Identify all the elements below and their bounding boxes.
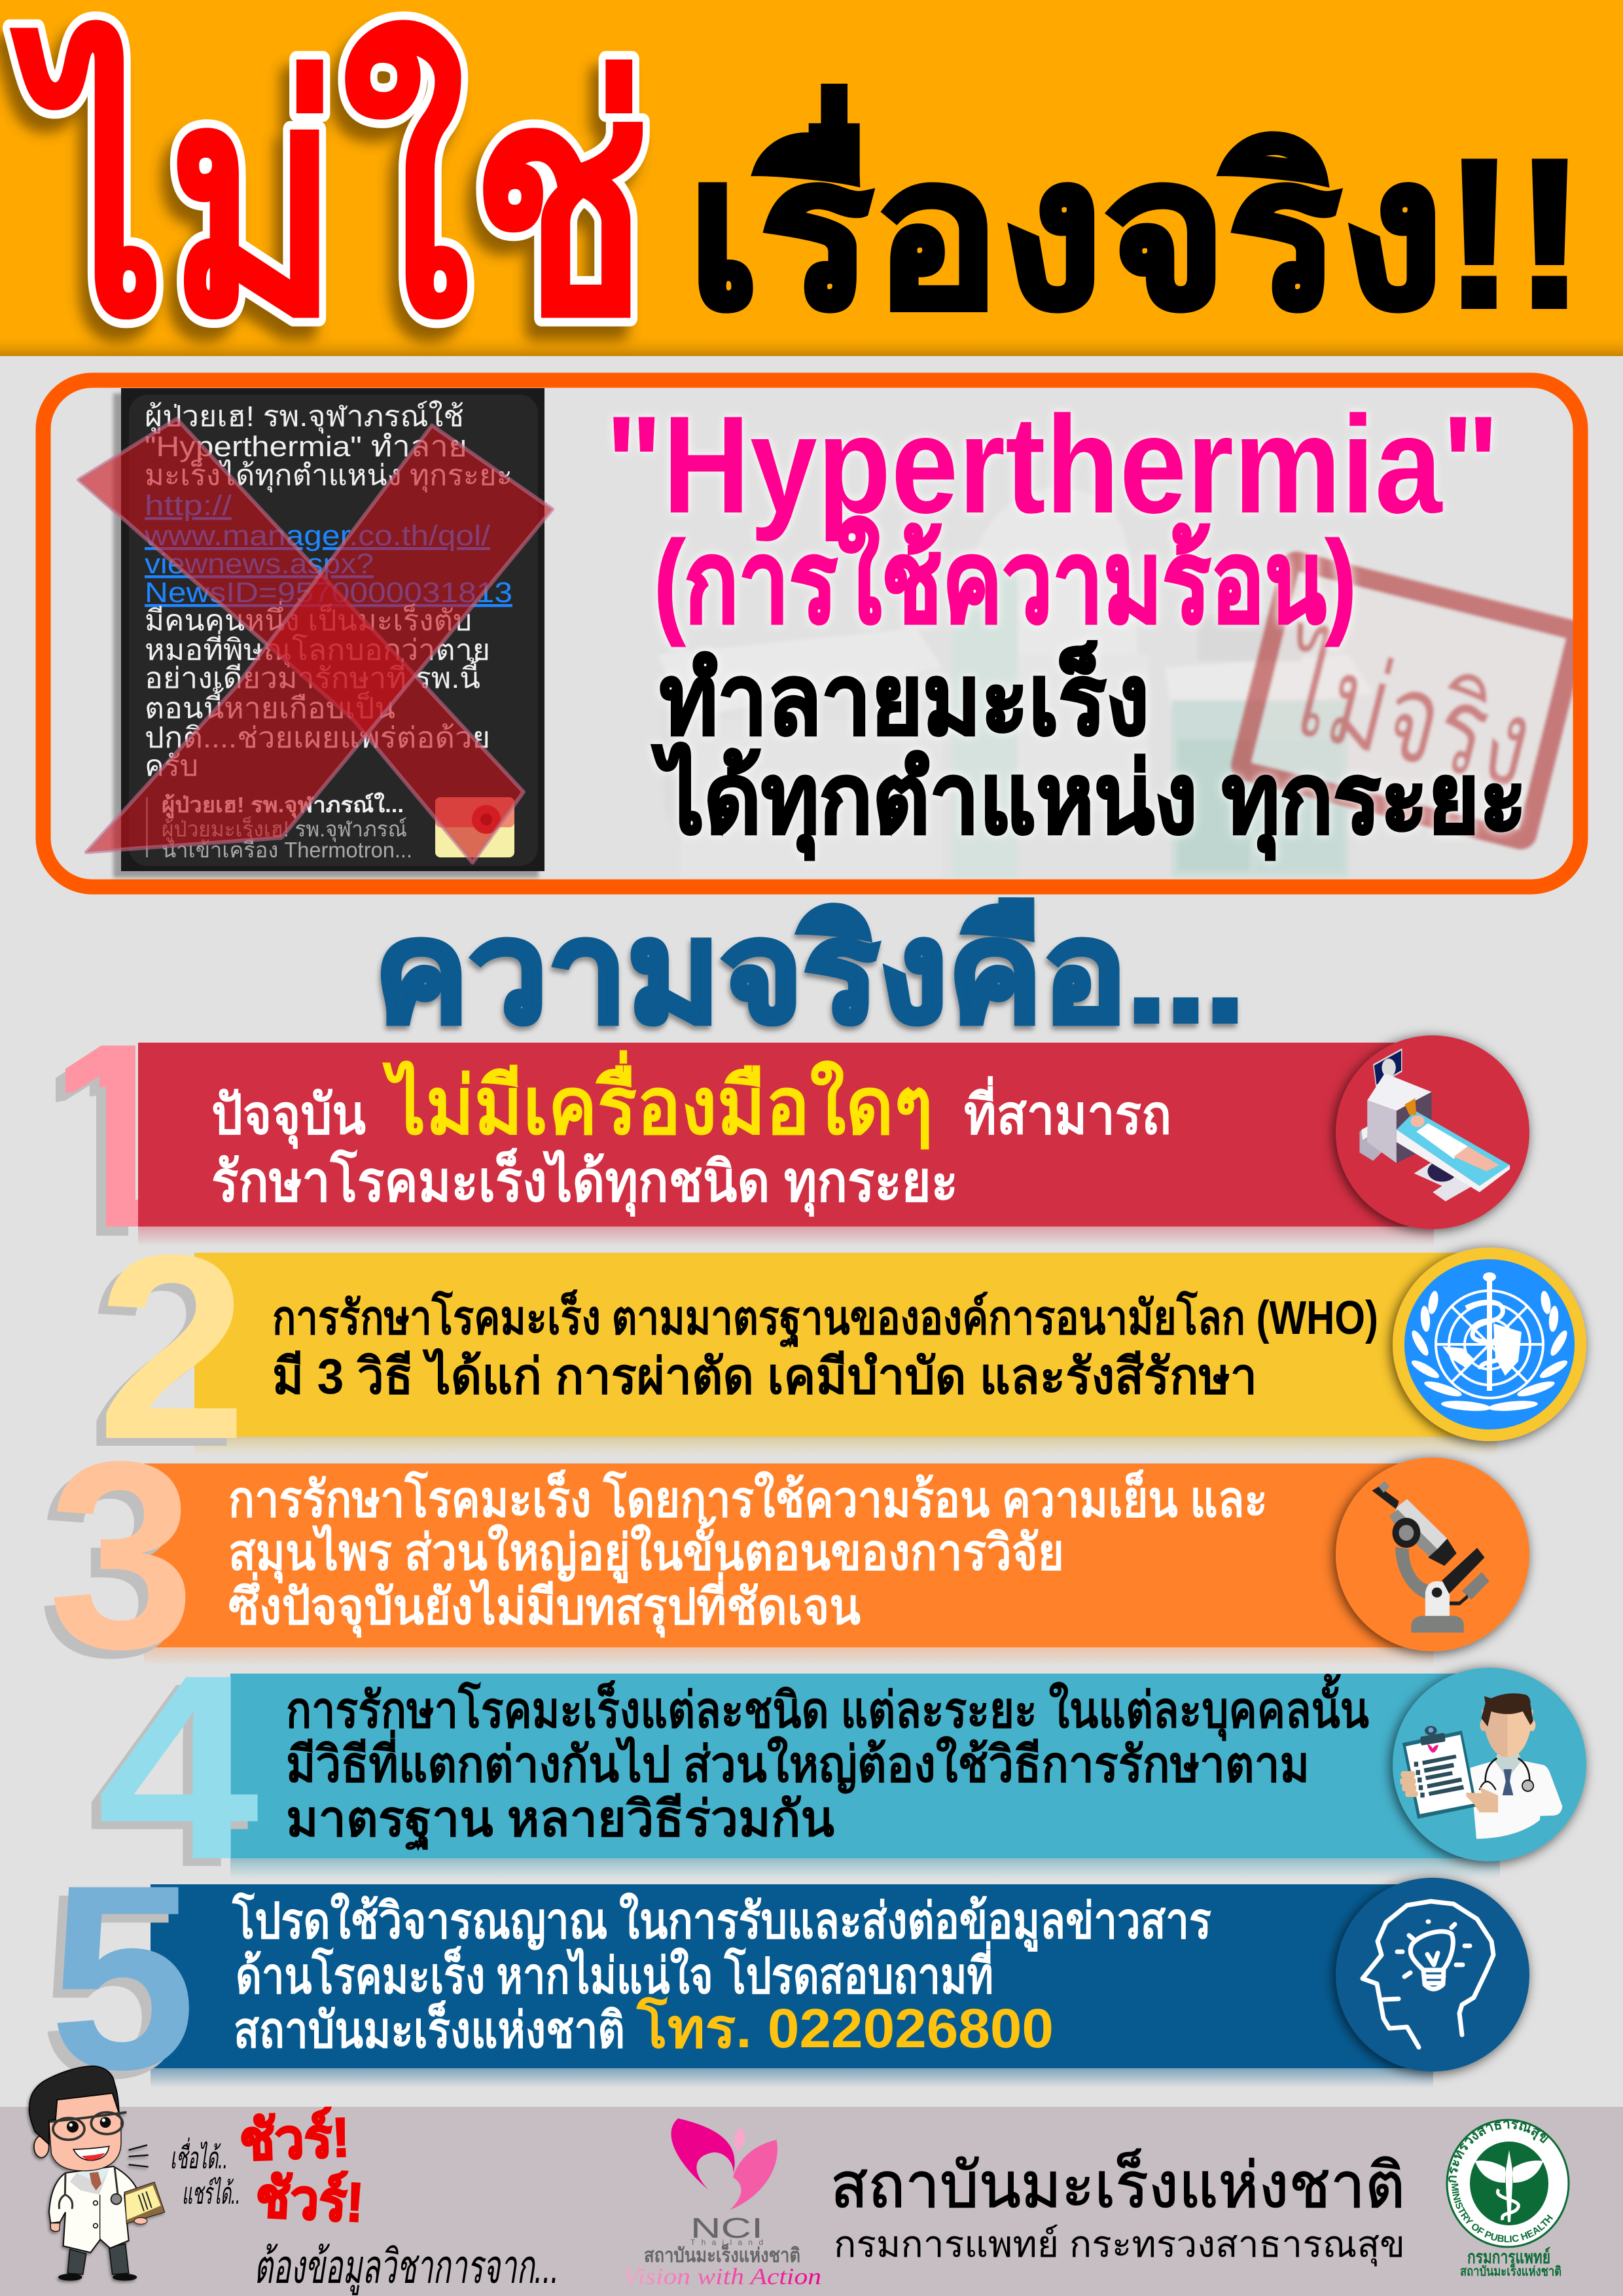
NCI logo: Vision with Action [623,2263,821,2289]
icon: MRI scanner [1336,1035,1529,1229]
message text: มีคนคนหนึ่ง เป็นมะเร็งตับ [145,600,472,637]
numeral 1 [56,1045,138,1236]
numeral 4: 4 [97,1621,261,1914]
numeral 4: 4 [87,1628,251,1922]
message text: www.manager.co.th/qol/ [144,520,491,552]
believe and share taglines: แชร์ได้.. [182,2176,240,2210]
message text: ตอนนี้หายเกือบเป็น [145,687,395,725]
numeral 1: 1 [28,998,175,1292]
message text: viewnews.aspx? [145,548,374,580]
fact 3 text: การรักษาโรคมะเร็ง โดยการใช้ความร้อน ความเย็น และ [228,1469,1268,1528]
fact 1 text [211,1050,1171,1217]
message text: ผู้ป่วยเฮ! รพ.จุฬาภรณ์ใช้ [145,400,464,434]
fact 3 text [228,1469,1268,1638]
Ministry of Public Health seal: กระทรวงสาธารณสุข [1448,2121,1548,2183]
seal caption: กรมการแพทย์ [1467,2247,1550,2267]
NCI logo: NCI [690,2212,763,2244]
subheading: use of heat: (การใช้ความร้อน) [654,516,1356,647]
header banner [0,0,1623,356]
message text: มะเร็งได้ทุกตำแหน่ง ทุกระยะ [145,458,512,493]
heading: the truth is: ความจริงคือ... [374,893,1245,1051]
organisation name: กรมการแพทย์ กระทรวงสาธารณสุข [834,2223,1405,2267]
fact 3 text: ซึ่งปัจจุบันยังไม่มีบทสรุปที่ชัดเจน [228,1571,861,1638]
believe and share taglines: เชื่อได้.. [170,2137,228,2175]
fact 1 text: ที่สามารถ [964,1076,1171,1145]
fact 2 text: มี 3 วิธี ได้แก่ การผ่าตัด เคมีบำบัด และรังสีรักษา [272,1348,1257,1405]
numeral 3: 3 [38,1415,185,1713]
fact 5 text: โทร. 022026800 [636,1997,1054,2059]
believe and share taglines: ต้องข้อมูลวิชาการจาก... [254,2241,559,2295]
fact 4 [87,1621,1586,1922]
footer band [0,2107,1623,2296]
fact 4 text: มีวิธีที่แตกต่างกันไป ส่วนใหญ่ต้องใช้วิธีการรักษาตาม [286,1729,1310,1794]
fact 1 text: รักษาโรคมะเร็งได้ทุกชนิด ทุกระยะ [211,1147,958,1217]
message text: NewsID=9570000031813 [145,577,512,609]
numeral 2: 2 [97,1200,247,1494]
fact 2 text [272,1289,1378,1405]
fact 5 text [232,1892,1211,2059]
numeral 5: 5 [49,1831,196,2125]
fact 5 [39,1831,1529,2133]
link preview [146,792,514,862]
fact 4 text: มาตรฐาน หลายวิธีร่วมกัน [286,1791,834,1851]
claim text [651,641,1527,860]
message text: ครับ [145,750,198,782]
icon: head with light bulb [1336,1878,1529,2072]
title: black word: เรื่องจริง!! [687,86,1585,351]
icon: microscope [1336,1458,1529,1651]
fact 4 text [286,1674,1369,1851]
message text [144,400,512,782]
message text: อย่างเดียวมารักษาที่ รพ.นี้ [145,657,480,694]
stamp: not true [1240,560,1578,841]
link preview: นำเข้าเครื่อง Thermotron... [162,835,412,862]
believe and share taglines: ชัวร์! [238,2106,351,2172]
fact 4 text: การรักษาโรคมะเร็งแต่ละชนิด แต่ละระยะ ในแต่ละบุคคลนั้น [286,1674,1369,1742]
cartoon doctor [29,2066,165,2281]
NCI logo [623,2119,821,2289]
message text: หมอที่พิษณุโลกบอกว่าตาย [145,630,490,668]
fact 2 text: การรักษาโรคมะเร็ง ตามมาตรฐานขององค์การอนามัยโลก (WHO) [272,1289,1378,1348]
organisation name: สถาบันมะเร็งแห่งชาติ [830,2148,1405,2221]
red X over screenshot [79,419,552,863]
faded medical equipment background [658,487,1374,877]
Ministry of Public Health seal: MINISTRY OF PUBLIC HEALTH [1452,2183,1553,2242]
seal caption [1460,2247,1561,2279]
heading: Hyperthermia: "Hyperthermia" [605,387,1499,542]
claim text: ทำลายมะเร็ง [660,641,1149,755]
fact 5 text: โปรดใช้วิจารณญาณ ในการรับและส่งต่อข้อมูลข่าวสาร [232,1892,1211,1952]
heading: Hyperthermia [605,387,1499,647]
claim text: ได้ทุกตำแหน่ง ทุกระยะ [651,743,1527,860]
numeral 5: 5 [39,1839,187,2133]
fact 2 [87,1200,1586,1502]
believe and share taglines: ชัวร์! [254,2166,365,2233]
panel: false claim [43,380,1580,887]
believe and share taglines [170,2106,559,2295]
icon: doctor with clipboard [1393,1668,1586,1861]
fact 1 text: ปัจจุบัน [211,1084,366,1149]
message text: http:// [145,490,232,522]
numeral 3: 3 [48,1407,195,1704]
fact 1 [56,1029,1537,1244]
fact 3 [38,1407,1529,1713]
link preview: ผู้ป่วยเฮ! รพ.จุฬาภรณ์ใ... [162,792,404,819]
message text: "Hyperthermia" ทำลาย [145,431,467,463]
NCI logo: สถาบันมะเร็งแห่งชาติ [644,2243,800,2267]
Ministry of Public Health seal [1446,2119,1569,2279]
NCI logo: Thailand [690,2238,763,2247]
title: red word: ไม่ใช่ [8,17,650,381]
fact 1 text: ไม่มีเครื่องมือใดๆ [382,1050,933,1151]
fake message screenshot [113,388,544,878]
fact 5 text: ด้านโรคมะเร็ง หากไม่แน่ใจ โปรดสอบถามที่ [236,1941,993,2004]
message text: ปกติ....ช่วยเผยแพร่ต่อด้วย [145,722,490,754]
fact 5 text: สถาบันมะเร็งแห่งชาติ [234,2000,625,2058]
fact 3 text: สมุนไพร ส่วนใหญ่อยู่ในขั้นตอนของการวิจัย [228,1516,1064,1584]
icon: WHO emblem [1393,1247,1586,1441]
numeral 1: 1 [38,989,185,1283]
panel border [43,380,1580,887]
link preview: ผู้ป่วยมะเร็งเฮ! รพ.จุฬาภรณ์ [162,816,407,842]
seal caption: สถาบันมะเร็งแห่งชาติ [1460,2263,1561,2279]
organisation name [830,2148,1405,2267]
numeral 2: 2 [87,1208,238,1502]
